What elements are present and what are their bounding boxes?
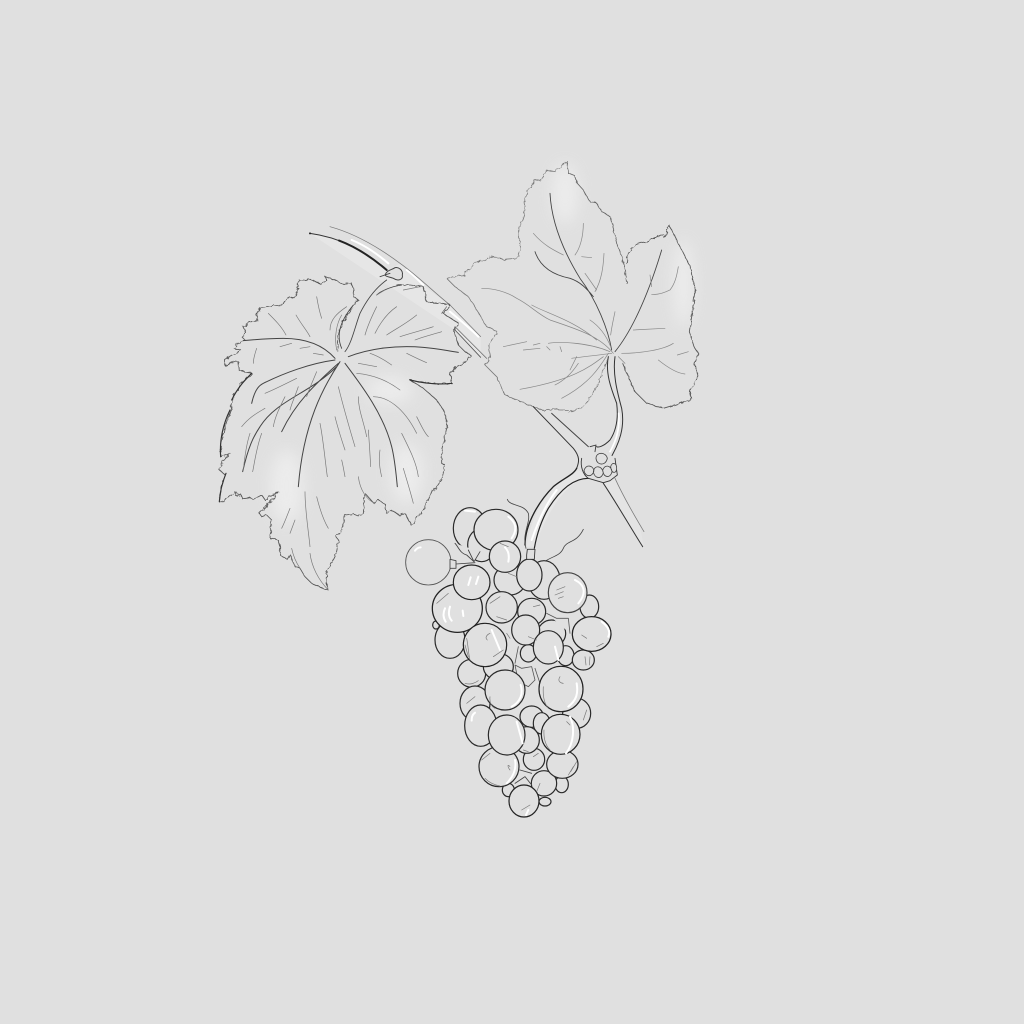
left leaf dark edges [219,373,452,502]
grape highlights [415,511,609,815]
right leaf outline [447,161,698,413]
right leaf soft shading [552,163,693,327]
left leaf [219,273,471,590]
stem node [581,445,617,483]
thorn branch right [603,478,644,548]
left leaf main veins [243,338,458,487]
left leaf outline [219,277,471,590]
grape shading ticks [437,543,603,810]
back grapes [406,508,599,687]
tendrils [507,499,583,563]
left leaf side veins [242,287,442,547]
right leaf main veins [535,193,662,352]
mid grapes [460,509,591,806]
left leaf soft shading [270,377,423,523]
left leaf sinus [339,273,402,352]
branch to grape cluster [527,470,590,547]
main stem lower [533,407,579,468]
front grapes [432,541,611,817]
right leaf and stems [442,161,698,548]
petiole [597,357,617,447]
grape cluster [406,499,611,817]
vine stem top [310,227,481,357]
